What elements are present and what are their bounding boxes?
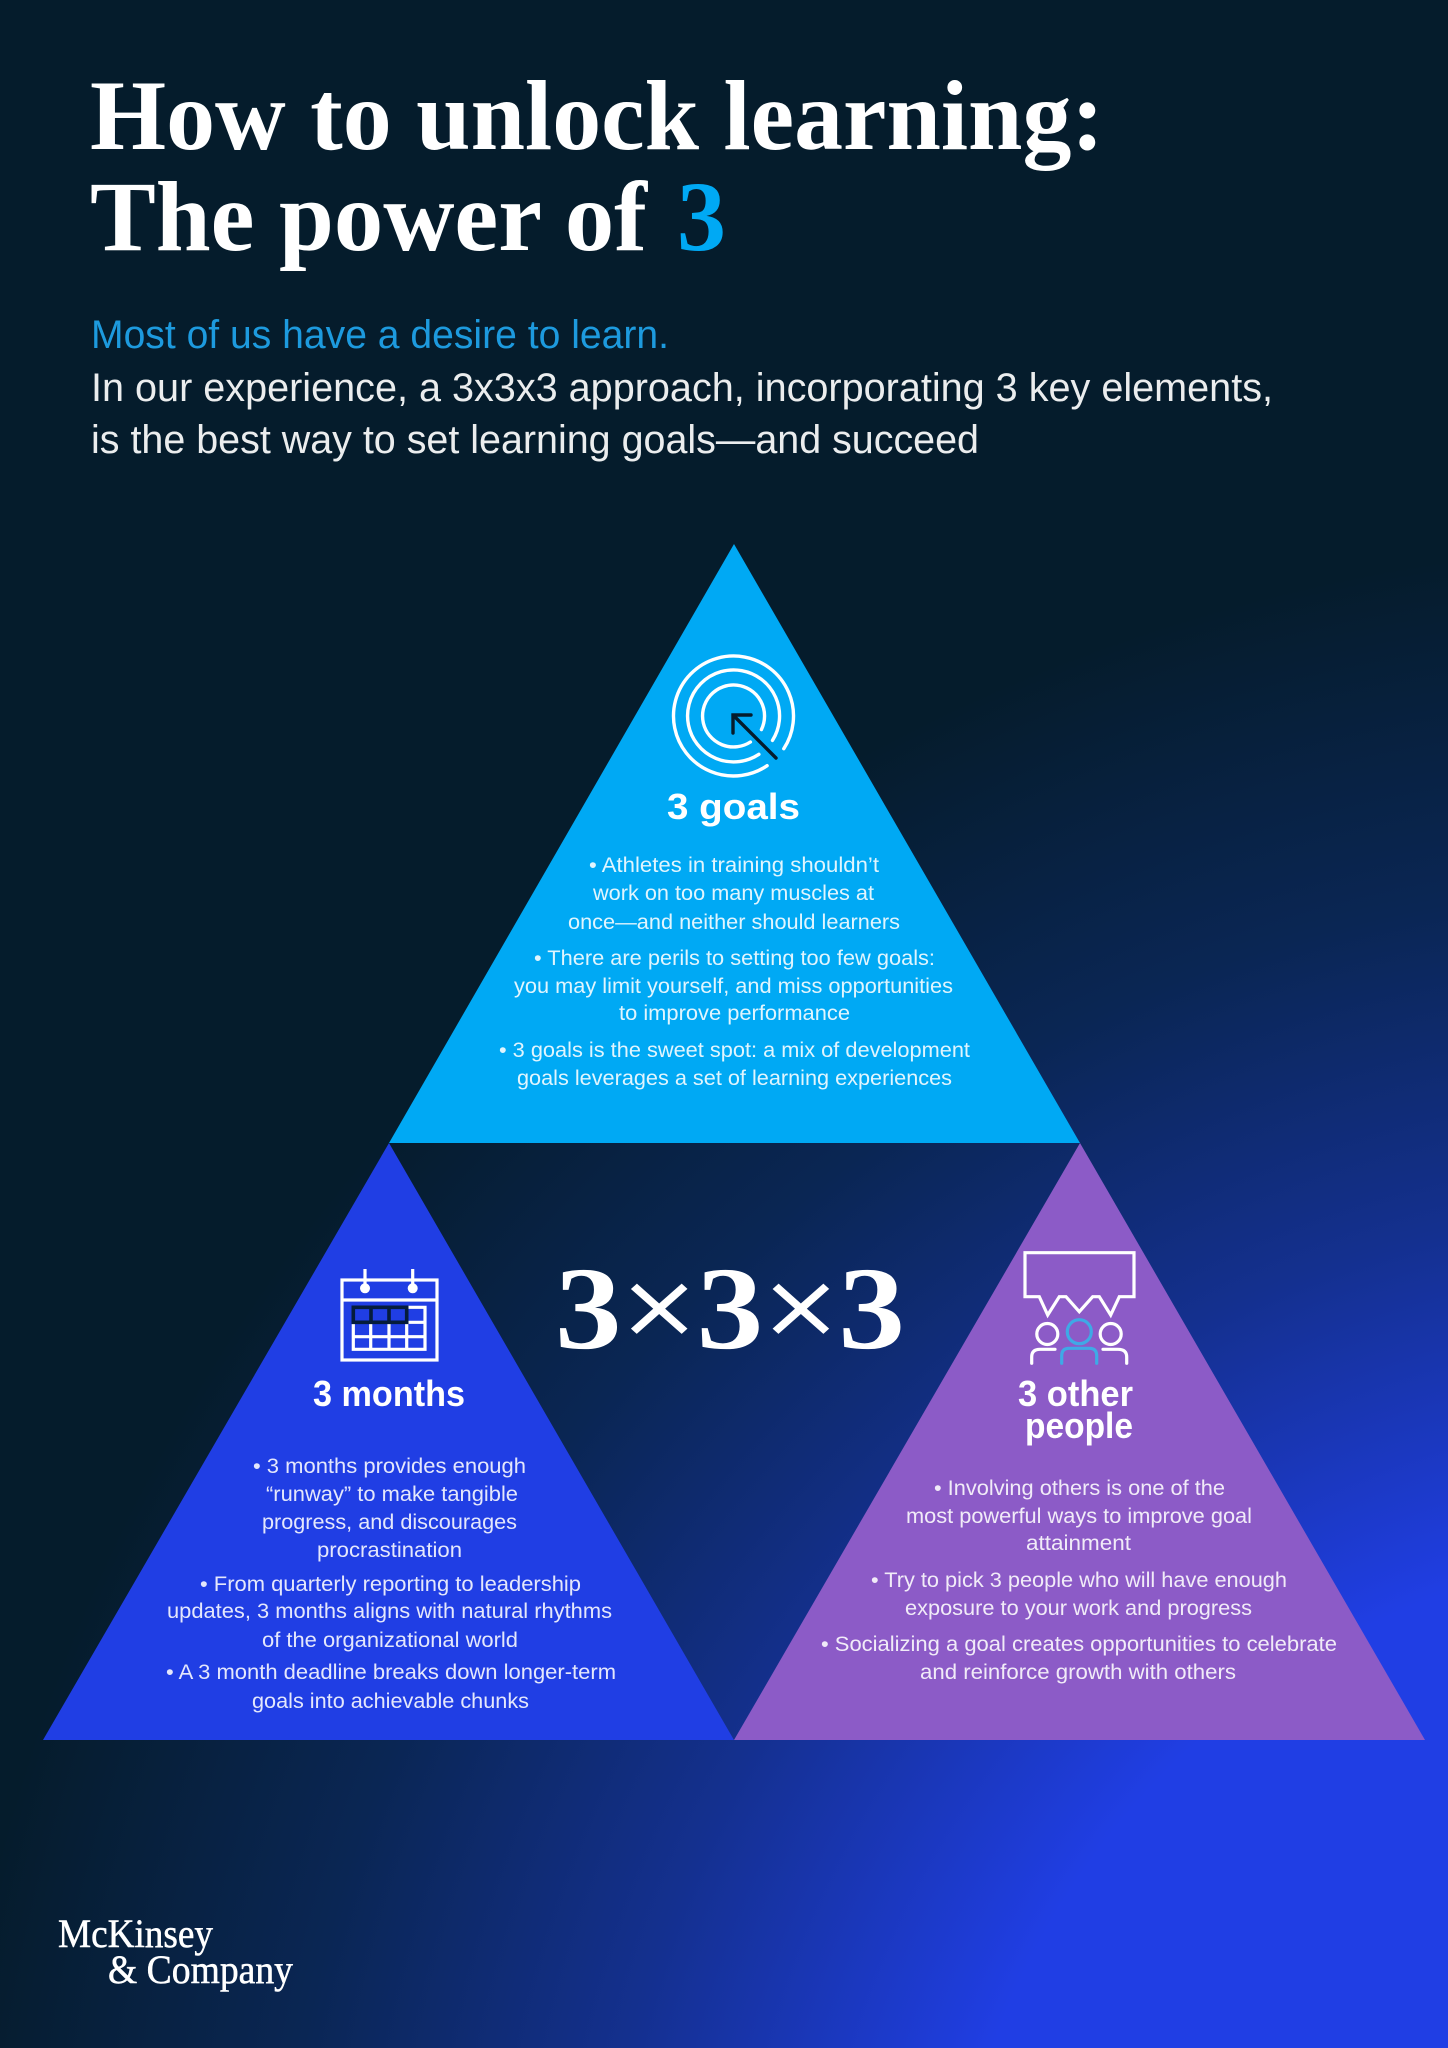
title: 3 [677,161,726,272]
heading: 3 goals: 3 goals [667,786,800,827]
text block: goals bullets: to improve performance [619,1002,850,1025]
text block: people bullets: • Try to pick 3 people who will have enough [871,1569,1287,1592]
text block: goals bullets: • There are perils to setting too few goals: [534,947,935,970]
text block: people bullets: attainment [1026,1532,1131,1555]
text block: goals bullets: once—and neither should learners [568,911,900,934]
heading: 3 other people: people [1025,1405,1133,1446]
panel: 3 months triangle [43,1143,734,1740]
text block: goals bullets: goals leverages a set of learning experiences [517,1067,952,1090]
text block: goals bullets: • 3 goals is the sweet spot: a mix of development [499,1039,970,1062]
icon: people with speech bubble [1025,1253,1134,1363]
text block: months bullets: updates, 3 months aligns with natural rhythms [167,1600,612,1623]
text block: people bullets [821,1477,1337,1684]
panel: 3 goals triangle [389,544,1080,1143]
text block: months bullets: • From quarterly reporting to leadership [200,1573,581,1596]
title [90,60,1104,272]
panel: 3 other people triangle [734,1143,1425,1740]
icon: calendar [342,1269,437,1360]
heading: 3 other people: 3 other [1018,1373,1133,1414]
text block: goals bullets: work on too many muscles at [592,882,874,905]
text block: months bullets: “runway” to make tangible [266,1483,518,1506]
text block: months bullets: • A 3 month deadline breaks down longer-term [166,1661,616,1684]
text block: people bullets: • Socializing a goal creates opportunities to celebrate [821,1633,1337,1656]
text block: people bullets: exposure to your work and progress [905,1597,1252,1620]
text block: goals bullets: you may limit yourself, and miss opportunities [514,975,953,998]
title: How to unlock learning: [90,60,1104,171]
logo: McKinsey & Company: McKinsey [58,1911,213,1956]
text block: months bullets: • 3 months provides enough [253,1455,526,1478]
text block: months bullets: progress, and discourages [262,1511,517,1534]
text block: goals bullets [499,854,970,1090]
title: The power of [90,161,649,272]
subtitle: In our experience, a 3x3x3 approach, incorporating 3 key elements, [91,366,1273,410]
heading: 3 months: 3 months [313,1373,465,1414]
text block: months bullets: goals into achievable chunks [252,1690,529,1713]
subtitle [91,313,1273,462]
subtitle: Most of us have a desire to learn. [91,313,669,357]
text block: people bullets: and reinforce growth with others [920,1661,1236,1684]
text block: months bullets [166,1455,616,1713]
text block: months bullets: of the organizational world [262,1629,518,1652]
logo: McKinsey & Company [58,1911,293,1992]
icon: target with arrow [674,656,794,776]
text block: people bullets: • Involving others is one of the [934,1477,1225,1500]
heading: 3 other people [1018,1373,1133,1446]
text block: months bullets: procrastination [317,1539,462,1562]
text block: goals bullets: • Athletes in training shouldn’t [589,854,879,877]
center label: 3x3x3: 3×3×3 [555,1243,905,1374]
subtitle: is the best way to set learning goals—and succeed [91,418,979,462]
logo: McKinsey & Company: & Company [108,1947,293,1992]
text block: people bullets: most powerful ways to improve goal [906,1505,1252,1528]
